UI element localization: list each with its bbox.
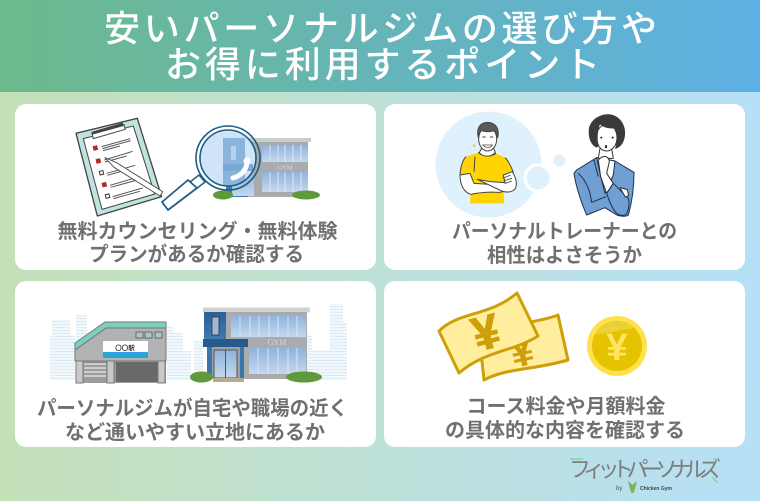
icon: trainer (460, 122, 516, 203)
panel: course fees (384, 281, 745, 447)
icon: yen coin (587, 316, 647, 376)
icon: magnifying glass (162, 126, 260, 210)
icon: city skyline (50, 304, 347, 380)
card text (452, 220, 677, 267)
icon: thinking woman (574, 114, 634, 216)
card text: 相性はよさそうか (487, 244, 642, 267)
card text: プランがあるか確認する (89, 242, 304, 266)
card text: パーソナルジムが自宅や職場の近く (37, 396, 348, 420)
title: 安いパーソナルジムの選び方や (104, 8, 657, 49)
icon: yen coin: ¥ (606, 327, 628, 369)
panel: trainer compatibility (384, 104, 745, 270)
logo: by (616, 486, 622, 492)
card text: など通いやすい立地にあるか (65, 421, 325, 444)
icon: thought bubble (436, 112, 565, 218)
card text (58, 219, 338, 266)
icon: gym building: GYM (268, 338, 286, 347)
logo (569, 457, 721, 493)
icon: front banknote (439, 293, 538, 373)
icon: gym building (213, 138, 320, 200)
icon: front banknote: ¥ (466, 304, 506, 363)
card text: パーソナルトレーナーとの (452, 220, 677, 243)
icon: gym building: GYM (277, 164, 293, 172)
logo: フィットパーソナルズ (569, 457, 721, 482)
icon: gym building (190, 308, 322, 382)
panel: convenient location (15, 281, 376, 447)
title: お得に利用するポイント (165, 44, 600, 85)
logo: Chicken Gym (640, 486, 673, 492)
panel: free counseling (15, 104, 376, 270)
icon: back banknote: ¥ (506, 326, 539, 377)
icon: train station: 〇〇駅 (115, 344, 135, 352)
title (104, 8, 657, 85)
card text: の具体的な内容を確認する (445, 419, 685, 442)
icon: clipboard with checklist (76, 118, 163, 216)
card text (37, 396, 348, 444)
card text (445, 395, 685, 442)
icon: back banknote (480, 315, 568, 380)
icon: chicken logo (628, 481, 637, 493)
icon: train station (75, 322, 166, 383)
card text: コース料金や月額料金 (466, 395, 666, 418)
title banner (0, 0, 760, 92)
card text: 無料カウンセリング・無料体験 (58, 219, 338, 243)
